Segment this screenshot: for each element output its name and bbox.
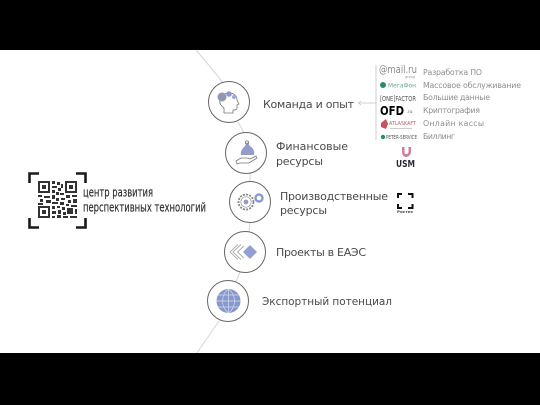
logo: Rostec	[397, 194, 414, 214]
QR code	[38, 181, 77, 218]
competency list: Разработка ПО	[423, 68, 482, 77]
partner logos	[379, 63, 417, 141]
logo: mail.ru group: group	[405, 75, 416, 79]
logo: Rostec: Ростех	[397, 210, 414, 214]
label: Финансовые	[276, 140, 348, 153]
icon: globe	[216, 289, 240, 313]
connecting arc	[196, 50, 250, 353]
circle	[226, 132, 266, 174]
logo: USM: USM	[396, 159, 415, 170]
logo: Peter-Service: PETER-SERVICE	[386, 135, 417, 141]
competency list: Криптография	[423, 106, 480, 115]
competency list: Онлайн кассы	[423, 119, 484, 128]
node: team and experience	[208, 82, 355, 122]
logo: centre for development of advanced technologies	[30, 174, 206, 228]
icon: gears	[238, 194, 262, 210]
arrow from logos to team	[358, 65, 376, 140]
node: projects in the EAEU	[224, 232, 366, 272]
logo wordmark: центр развития	[83, 186, 153, 200]
circle	[208, 280, 248, 322]
bottom black band	[0, 353, 540, 405]
node: financial resources	[226, 132, 348, 174]
label: Проекты в ЕАЭС	[276, 246, 366, 259]
competency list: Массовое обслуживание	[423, 81, 521, 90]
node: export potential	[208, 280, 392, 322]
label: ресурсы	[280, 204, 327, 217]
logo: USM	[396, 147, 415, 170]
icon: head with gears	[218, 91, 239, 113]
logo: MegaFon: МегаФон	[388, 82, 416, 90]
icon: layered diamonds	[230, 244, 257, 260]
competency list: Биллинг	[423, 132, 455, 141]
circle	[230, 182, 270, 222]
label: Производственные	[280, 190, 388, 203]
logo: mail.ru group: @mail.ru	[379, 63, 417, 76]
top black band	[0, 0, 540, 50]
logo: mail.ru group	[379, 63, 417, 79]
circle	[224, 232, 266, 272]
label: ресурсы	[276, 155, 323, 168]
competency list: Большие данные	[423, 93, 490, 102]
label: Команда и опыт	[263, 98, 355, 111]
logo wordmark: перспективных технологий	[83, 200, 206, 214]
node: production resources	[230, 182, 388, 222]
label: Экспортный потенциал	[262, 296, 392, 308]
logo: OFD: OFD	[380, 103, 404, 118]
logo: Atlas Kraft: ATLASKAFT	[389, 121, 417, 127]
icon: hand holding money bag	[236, 141, 257, 164]
logo: OFD: .ru	[407, 109, 413, 114]
logo: OneFactor: [ONE]FACTOR	[380, 95, 416, 103]
logo frame brackets	[30, 174, 86, 228]
circle	[208, 82, 250, 122]
